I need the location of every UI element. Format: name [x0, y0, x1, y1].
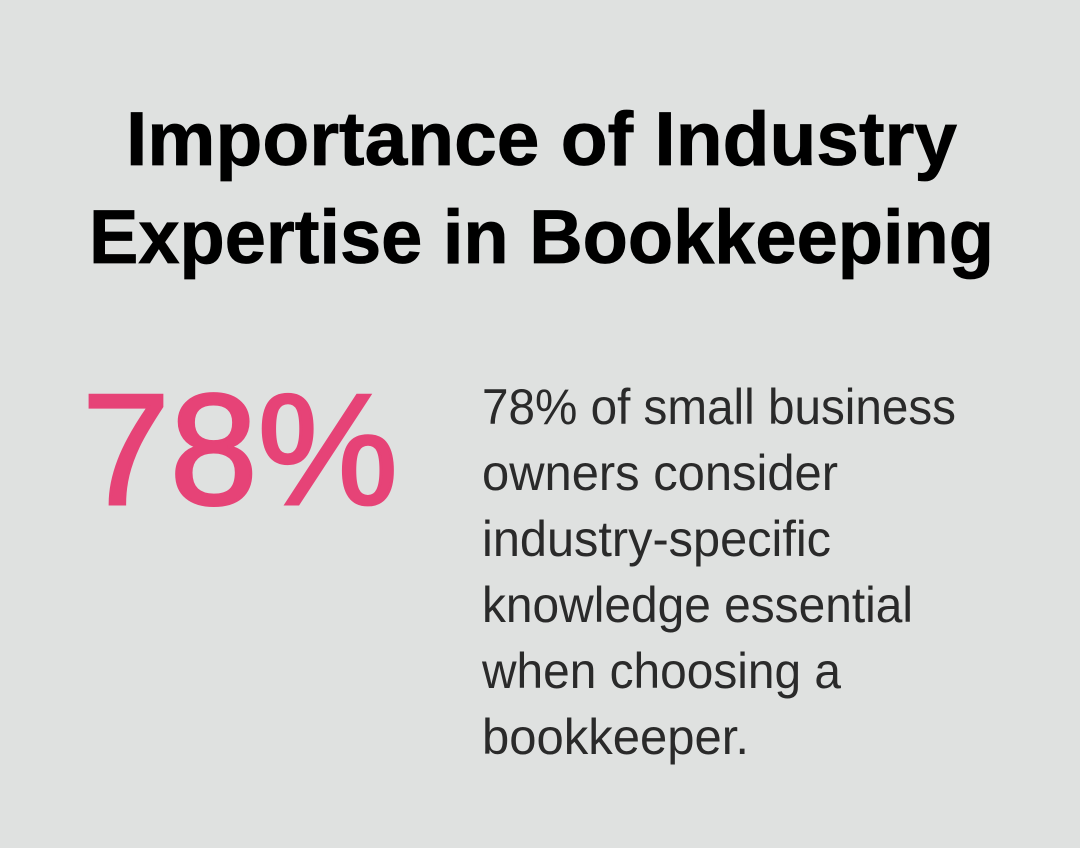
- description text: bookkeeper.: [482, 709, 749, 765]
- description text: [481, 379, 956, 765]
- description text: owners consider: [482, 445, 838, 501]
- title: Expertise in Bookkeeping: [89, 195, 994, 280]
- description text: when choosing a: [481, 643, 841, 699]
- title: [89, 97, 994, 280]
- title: Importance of Industry: [126, 97, 957, 182]
- description text: 78% of small business: [482, 379, 956, 435]
- description text: knowledge essential: [482, 577, 913, 633]
- big statistic: 78%: 78%: [82, 362, 398, 538]
- description text: industry-specific: [482, 511, 831, 567]
